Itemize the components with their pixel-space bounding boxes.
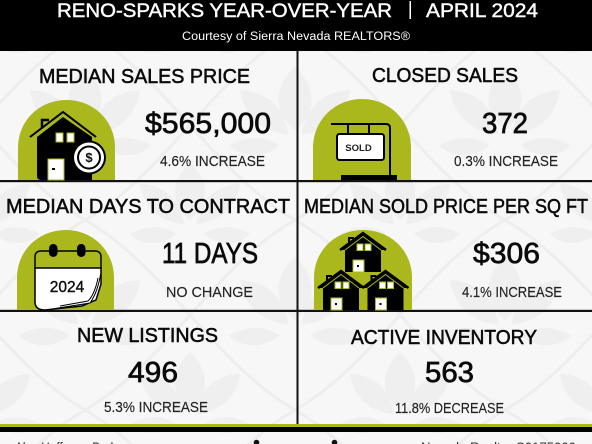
change: 4.6% INCREASE: [160, 154, 265, 170]
heading: ACTIVE INVENTORY: [351, 327, 537, 349]
icon: house with coin: [18, 100, 115, 180]
panel: median days to contract: [6, 196, 290, 310]
value: 372: [482, 108, 528, 140]
panel: closed sales: [313, 65, 558, 180]
change: 4.1% INCREASE: [462, 285, 562, 301]
heading: NEW LISTINGS: [77, 325, 218, 347]
value: 496: [128, 357, 178, 389]
panel: active inventory: [351, 327, 537, 417]
change: NO CHANGE: [166, 285, 253, 301]
panel: median sold price per sq ft: [304, 196, 588, 310]
icon: sold sign: SOLD: [345, 143, 372, 154]
heading: MEDIAN DAYS TO CONTRACT: [6, 196, 290, 218]
title: RENO-SPARKS YEAR-OVER-YEAR: [57, 0, 392, 22]
icon: house with coin: $: [85, 150, 93, 165]
footer cropped text: [15, 439, 576, 444]
panel: new listings: [77, 325, 218, 416]
footer bar: [0, 424, 592, 432]
value: $306: [473, 238, 540, 270]
value: 11 DAYS: [162, 238, 258, 270]
change: 5.3% INCREASE: [104, 400, 208, 416]
header band: [0, 0, 592, 51]
value: $565,000: [145, 108, 271, 140]
icon: calendar: [17, 230, 114, 310]
change: 0.3% INCREASE: [454, 154, 558, 170]
panel: median sales price: [18, 66, 271, 180]
icon: calendar: 2024: [50, 279, 85, 296]
title: [57, 0, 538, 22]
heading: CLOSED SALES: [372, 65, 518, 87]
value: 563: [425, 357, 474, 389]
change: 11.8% DECREASE: [395, 401, 504, 417]
icon: three houses: [314, 230, 412, 310]
subtitle: Courtesy of Sierra Nevada REALTORS®: [182, 31, 411, 43]
heading: MEDIAN SALES PRICE: [39, 66, 250, 88]
title: APRIL 2024: [426, 0, 538, 22]
icon: sold sign: [313, 99, 411, 180]
